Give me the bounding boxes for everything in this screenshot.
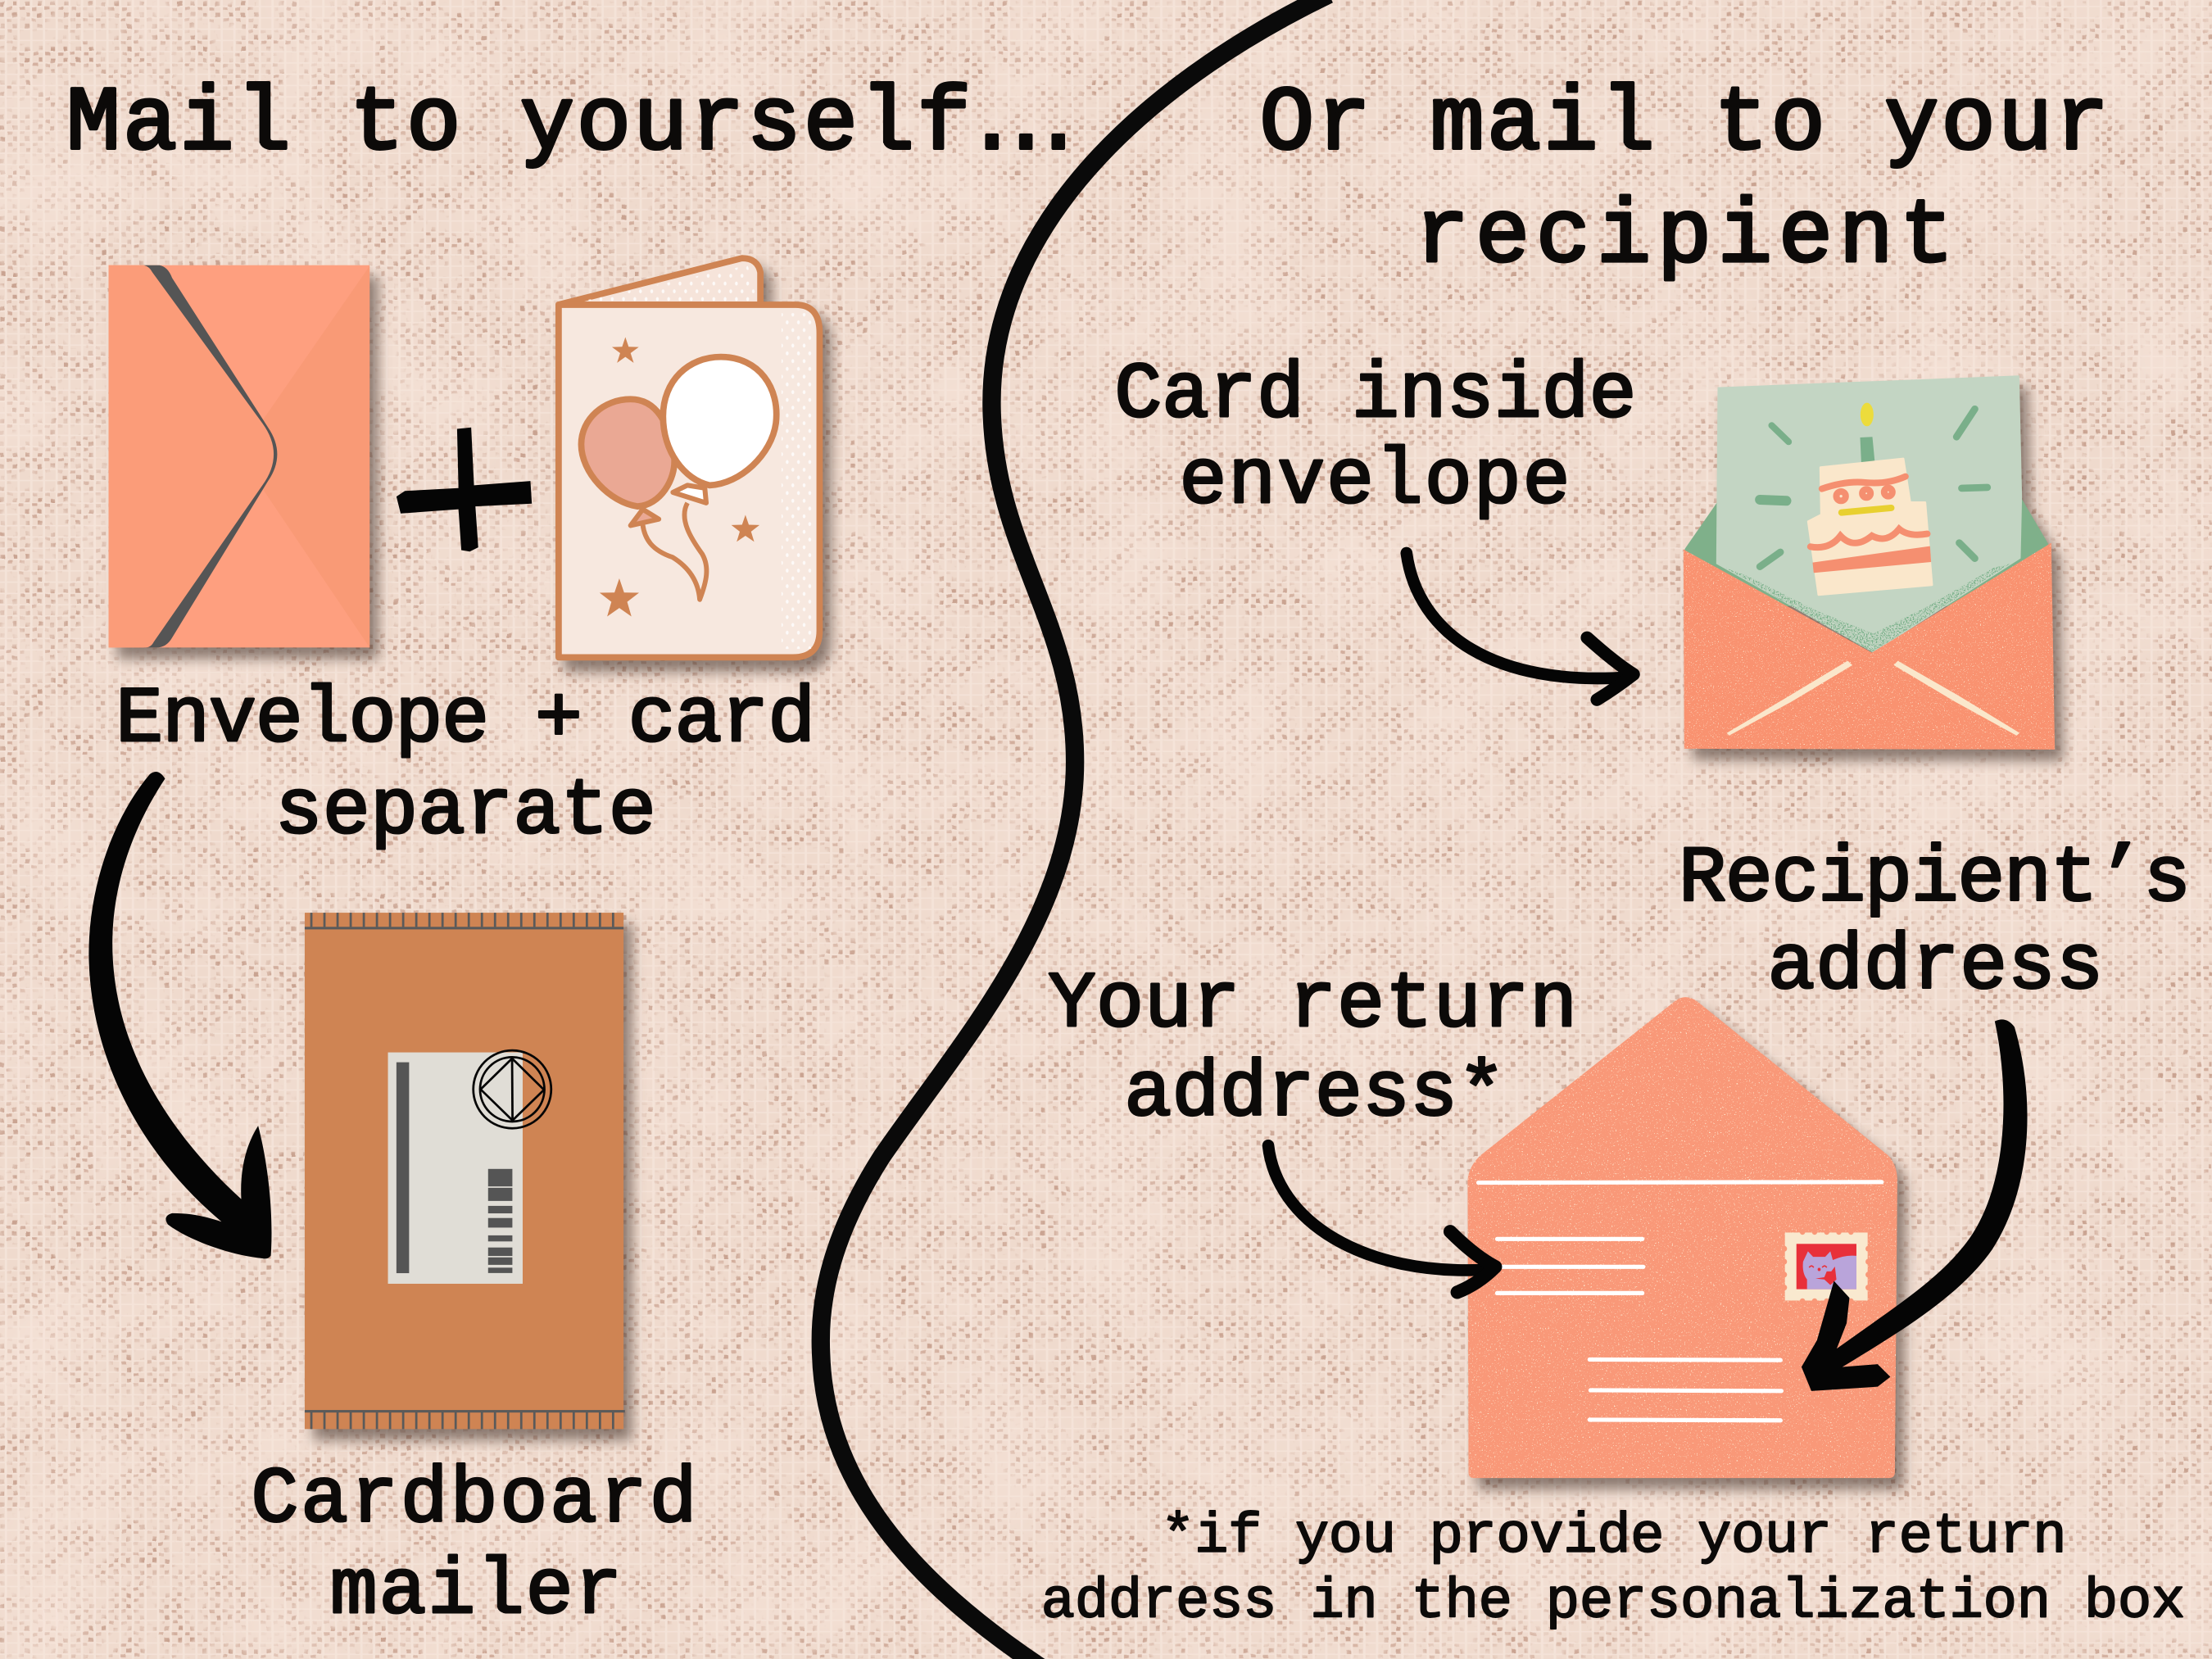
label: your return address: address* [1124,1049,1505,1138]
icon: addressed envelope with stamp [1467,997,1897,1478]
balloon strings [643,503,706,600]
label: envelope + card separate: separate [275,767,656,856]
label: your return address: Your return [1048,960,1577,1049]
cake [1808,459,1932,595]
arrow: envelope and card to mailer [88,772,271,1258]
mailing label [388,1053,523,1284]
candle [1860,437,1875,467]
mailer top tear strip [311,913,613,927]
burst lines [1760,409,1988,567]
icon: cardboard mailer [305,913,625,1429]
heading: or mail to your recipient: Or mail to your [1260,74,2109,176]
arrow: to card inside envelope [1407,553,1634,700]
label: recipient's address [1679,835,2191,1011]
return address lines [1497,1239,1643,1293]
label: card inside envelope [1114,351,1636,526]
flap fold line [1478,1176,1882,1188]
arrow: to return address [1268,1145,1495,1292]
label: envelope + card separate [116,675,815,856]
stars [612,338,639,363]
label: card inside envelope: Card inside [1114,351,1636,440]
postage stamp [1782,1229,1871,1304]
label: cardboard mailer: mailer [330,1547,622,1636]
green stipple along the fold [1725,564,2010,653]
arrow: to recipient's address [1802,1019,2028,1391]
recipient address lines [1589,1359,1782,1421]
icon: open envelope with birthday card [1684,375,2055,750]
icon: envelope back [109,265,369,647]
heading: or mail to your recipient [1260,74,2109,289]
postal seal [474,1050,551,1128]
label: envelope + card separate: Envelope + card [116,675,815,764]
curved divider line [821,0,1329,1659]
footnote: *if you provide your return [1161,1505,2067,1569]
label: recipient's address: Recipient’s [1679,835,2191,924]
label: recipient's address: address [1768,922,2103,1011]
barcode [488,1169,512,1273]
heading: mail to yourself: ... [965,74,1088,176]
footnote [1041,1505,2185,1634]
envelope front [1684,543,2055,750]
footnote: address in the personalization box [1041,1570,2185,1634]
heading: or mail to your recipient: recipient [1415,187,1954,289]
white balloon [663,357,777,485]
label: card inside envelope: envelope [1180,437,1571,526]
pink balloon [581,399,674,506]
envelope crease lines [1727,661,1852,736]
heading: mail to yourself: Mail to yourself [66,74,974,176]
label: your return address [1048,960,1577,1138]
label: cardboard mailer [252,1455,697,1636]
icon: birthday card with balloons [559,258,819,657]
label: cardboard mailer: Cardboard [252,1455,697,1544]
icon: plus sign [397,428,532,551]
mailer bottom tear strip [311,1412,613,1429]
